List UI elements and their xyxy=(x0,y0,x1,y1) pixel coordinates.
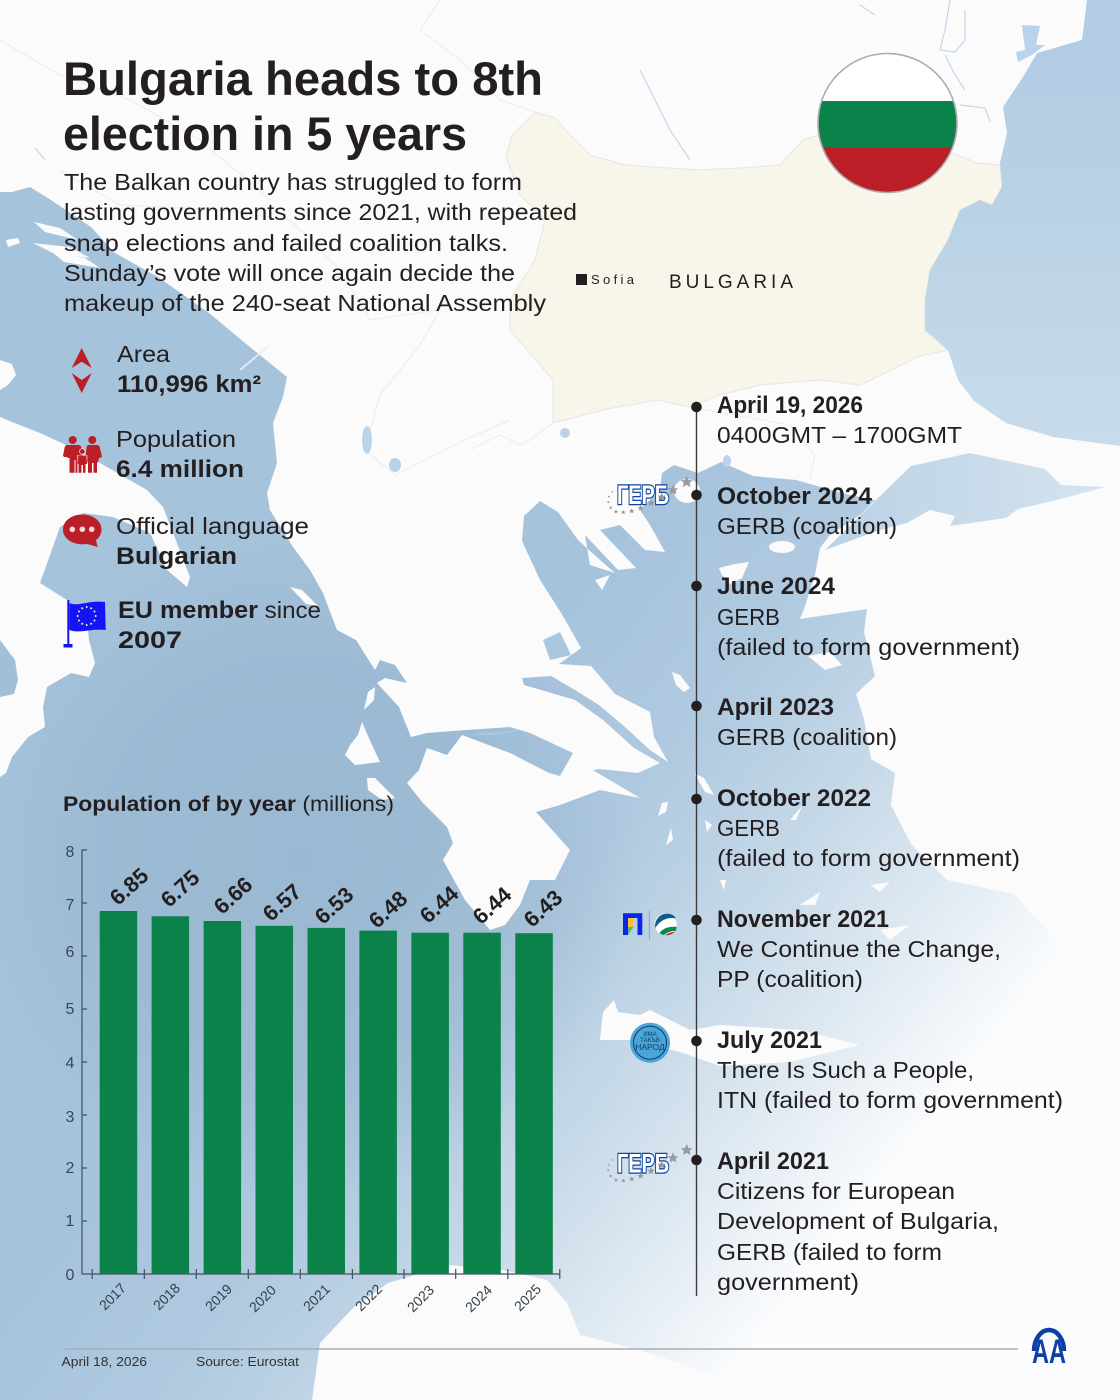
logo: There Is Such a People: ИМА xyxy=(643,1032,657,1038)
axis labels: 7 xyxy=(66,897,75,914)
Aegean inlets on land xyxy=(470,632,571,735)
intro text: The Balkan country has struggled to form xyxy=(64,169,522,195)
stat: language: Official language xyxy=(116,513,309,539)
axis labels: 8 xyxy=(66,844,75,861)
timeline line xyxy=(696,407,698,1296)
timeline: October 2024 xyxy=(691,483,897,539)
stat: population: 6.4 million xyxy=(116,456,244,483)
year labels: 2024 xyxy=(462,1282,495,1315)
logo: GERB: ГЕРБ xyxy=(617,480,669,510)
year labels: 2023 xyxy=(404,1282,437,1315)
timeline: June 2024: June 2024 xyxy=(717,573,836,600)
timeline: April 2023 xyxy=(691,694,897,750)
value labels xyxy=(105,863,567,933)
timeline: April 2021: Citizens for European xyxy=(717,1178,955,1204)
value labels: 6.66 xyxy=(209,872,257,919)
axis labels: 1 xyxy=(66,1213,75,1230)
value labels: 6.44 xyxy=(415,880,464,928)
icon: family xyxy=(63,436,102,473)
value labels: 6.85 xyxy=(105,863,153,910)
intro text: snap elections and failed coalition talks. xyxy=(64,230,508,256)
axis labels: 4 xyxy=(66,1055,75,1072)
timeline: July 2021 xyxy=(691,1027,1063,1113)
footer source: Source: Eurostat xyxy=(196,1354,299,1369)
value labels: 6.43 xyxy=(519,885,567,932)
axis labels: 2 xyxy=(66,1160,75,1177)
timeline: April 2021: GERB (failed to form xyxy=(717,1239,942,1265)
value labels: 6.75 xyxy=(156,865,204,912)
timeline: July 2021: July 2021 xyxy=(717,1027,822,1054)
logo: There Is Such a People xyxy=(630,1023,670,1063)
timeline: November 2021: PP (coalition) xyxy=(717,966,863,992)
logo: Anadolu Agency: AA xyxy=(1032,1333,1066,1371)
axis labels: 5 xyxy=(66,1001,75,1018)
timeline: June 2024 xyxy=(691,573,1020,660)
axis labels: 6 xyxy=(66,944,75,961)
stat: EU membership xyxy=(64,597,321,654)
icon: EU flag xyxy=(64,600,106,648)
bars xyxy=(100,911,553,1274)
stat: population: Population xyxy=(116,426,236,452)
chart axes xyxy=(82,850,560,1279)
stat: area: Area xyxy=(117,341,170,367)
timeline: April 19, 2026: 0400GMT – 1700GMT xyxy=(717,422,962,448)
chart title: Population of by year (millions) xyxy=(63,793,394,816)
Black Sea xyxy=(925,0,1120,446)
timeline: October 2024: October 2024 xyxy=(717,483,873,510)
stat: area xyxy=(72,341,261,398)
stat: EU membership: EU member since xyxy=(118,597,321,624)
logo: There Is Such a People: ТАКЪВ xyxy=(640,1038,660,1044)
flag of Bulgaria xyxy=(815,50,960,196)
timeline: July 2021: ITN (failed to form government) xyxy=(717,1087,1063,1113)
timeline: April 2023: April 2023 xyxy=(717,694,834,721)
intro text: makeup of the 240-seat National Assembly xyxy=(64,290,547,316)
axis labels: 3 xyxy=(66,1109,75,1126)
value labels: 6.48 xyxy=(364,886,412,933)
stat: language: Bulgarian xyxy=(116,543,237,570)
icon: area arrows xyxy=(72,348,92,393)
year labels: 2025 xyxy=(511,1281,544,1314)
Bulgaria xyxy=(506,112,1002,423)
timeline: November 2021: We Continue the Change, xyxy=(717,936,1001,962)
map label: Sofia: Sofia xyxy=(591,272,635,287)
timeline: April 19, 2026: April 19, 2026 xyxy=(717,392,863,419)
intro text: lasting governments since 2021, with repeated xyxy=(64,199,577,225)
timeline: April 2021: government) xyxy=(717,1269,859,1295)
logo: GERB xyxy=(607,476,693,514)
value labels: 6.44 xyxy=(468,881,517,929)
timeline: April 2021: Development of Bulgaria, xyxy=(717,1208,999,1234)
year labels: 2017 xyxy=(96,1280,129,1313)
title: Bulgaria heads to 8th xyxy=(63,52,543,105)
footer date: April 18, 2026 xyxy=(62,1354,147,1369)
timeline: June 2024: (failed to form government) xyxy=(717,634,1020,660)
title xyxy=(63,52,543,160)
title: election in 5 years xyxy=(63,107,467,160)
timeline: July 2021: There Is Such a People, xyxy=(717,1057,974,1083)
Sea of Marmara xyxy=(825,453,1105,550)
timeline: November 2021: November 2021 xyxy=(717,906,889,933)
stat: EU membership: 2007 xyxy=(118,627,182,654)
timeline: April 19, 2026 xyxy=(691,392,962,448)
timeline: October 2024: GERB (coalition) xyxy=(717,513,897,539)
axis labels xyxy=(66,844,75,1284)
logo: There Is Such a People: НАРОД xyxy=(635,1042,665,1052)
timeline: October 2022: GERB xyxy=(717,815,780,841)
icon: speech bubble xyxy=(63,514,102,547)
stat: population xyxy=(63,426,244,483)
map label: Bulgaria: BULGARIA xyxy=(669,272,793,293)
logo: GERB 2021 xyxy=(607,1144,693,1183)
axis labels: 0 xyxy=(66,1267,75,1284)
year labels: 2022 xyxy=(352,1281,385,1314)
year labels: 2020 xyxy=(246,1282,279,1315)
value labels: 6.57 xyxy=(258,879,306,926)
timeline: October 2022: October 2022 xyxy=(717,785,871,812)
footer rule xyxy=(65,1348,1018,1350)
timeline: October 2022: (failed to form government) xyxy=(717,845,1020,871)
timeline: April 2023: GERB (coalition) xyxy=(717,724,897,750)
value labels: 6.53 xyxy=(310,882,358,929)
timeline: April 2021: April 2021 xyxy=(717,1148,829,1175)
logo: We Continue the Change xyxy=(623,911,677,940)
logo: GERB 2021: ГЕРБ xyxy=(617,1148,669,1178)
timeline: October 2022 xyxy=(691,785,1020,871)
intro text xyxy=(64,169,577,316)
logo: Anadolu Agency xyxy=(1032,1330,1066,1371)
year labels: 2018 xyxy=(150,1280,183,1313)
bar chart: population by year xyxy=(66,844,567,1315)
year labels: 2021 xyxy=(300,1281,333,1314)
year labels: 2019 xyxy=(202,1281,235,1314)
stat: language xyxy=(63,513,309,570)
intro text: Sunday’s vote will once again decide the xyxy=(64,260,515,286)
timeline: June 2024: GERB xyxy=(717,604,780,630)
timeline: November 2021 xyxy=(691,906,1001,992)
stat: area: 110,996 km² xyxy=(117,371,261,398)
year labels xyxy=(96,1280,544,1315)
timeline: April 2021 xyxy=(691,1148,999,1295)
